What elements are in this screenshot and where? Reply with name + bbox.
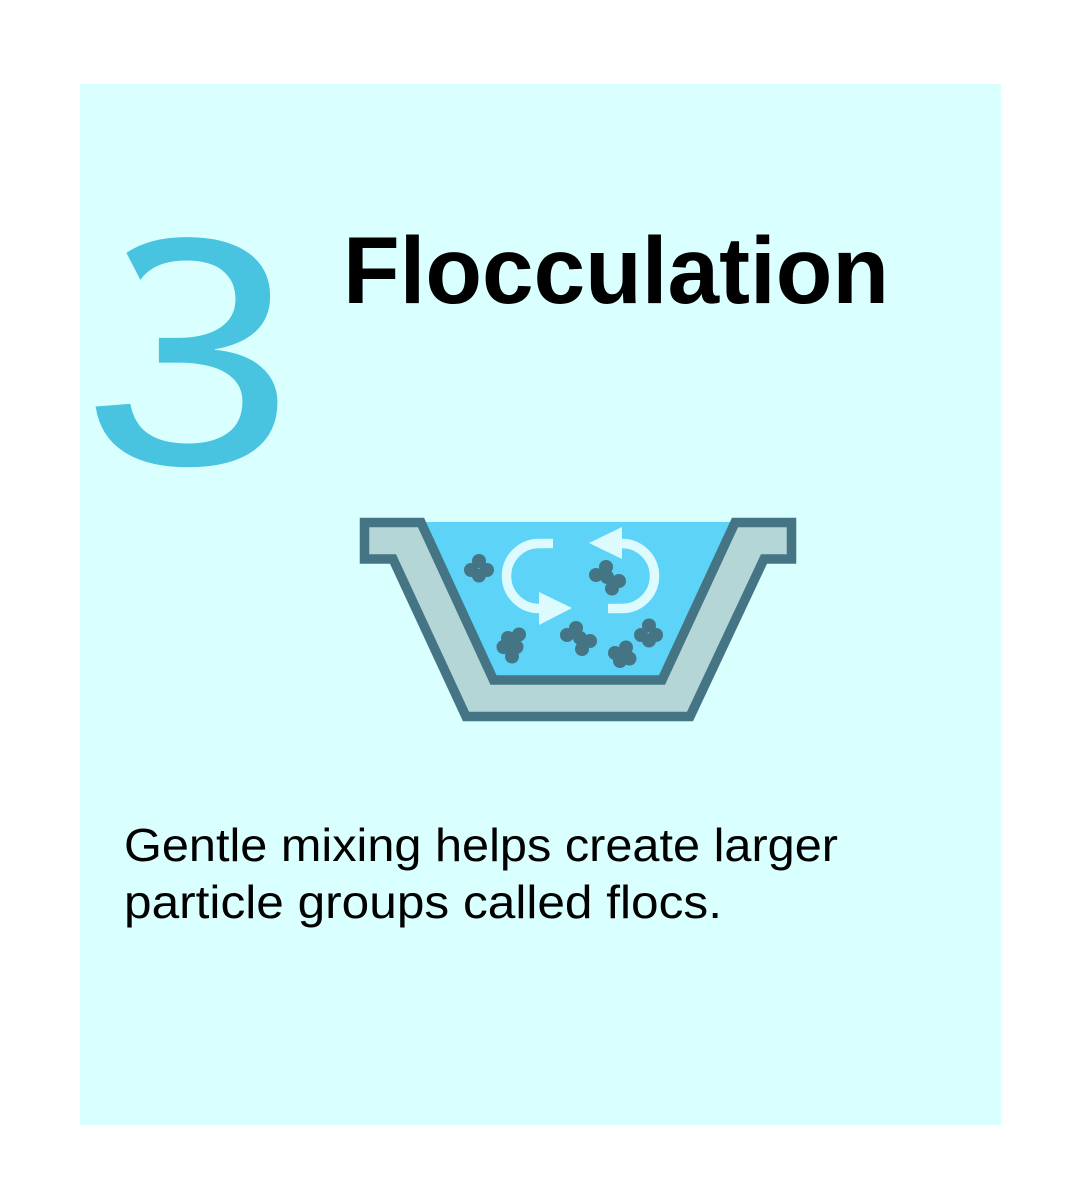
arrow: right mixing circulation	[589, 527, 654, 608]
body text: particle groups called flocs.	[124, 876, 722, 928]
icon: flocculation basin	[364, 522, 792, 716]
particle flocs	[464, 554, 663, 668]
step number 3: 3	[81, 171, 294, 533]
water	[424, 522, 733, 677]
arrow: left mixing circulation	[506, 544, 572, 625]
basin wall	[364, 522, 792, 716]
body text: Gentle mixing helps create larger	[124, 819, 838, 871]
body text	[124, 819, 838, 928]
panel: background	[80, 84, 1001, 1125]
heading: Flocculation	[343, 218, 889, 324]
